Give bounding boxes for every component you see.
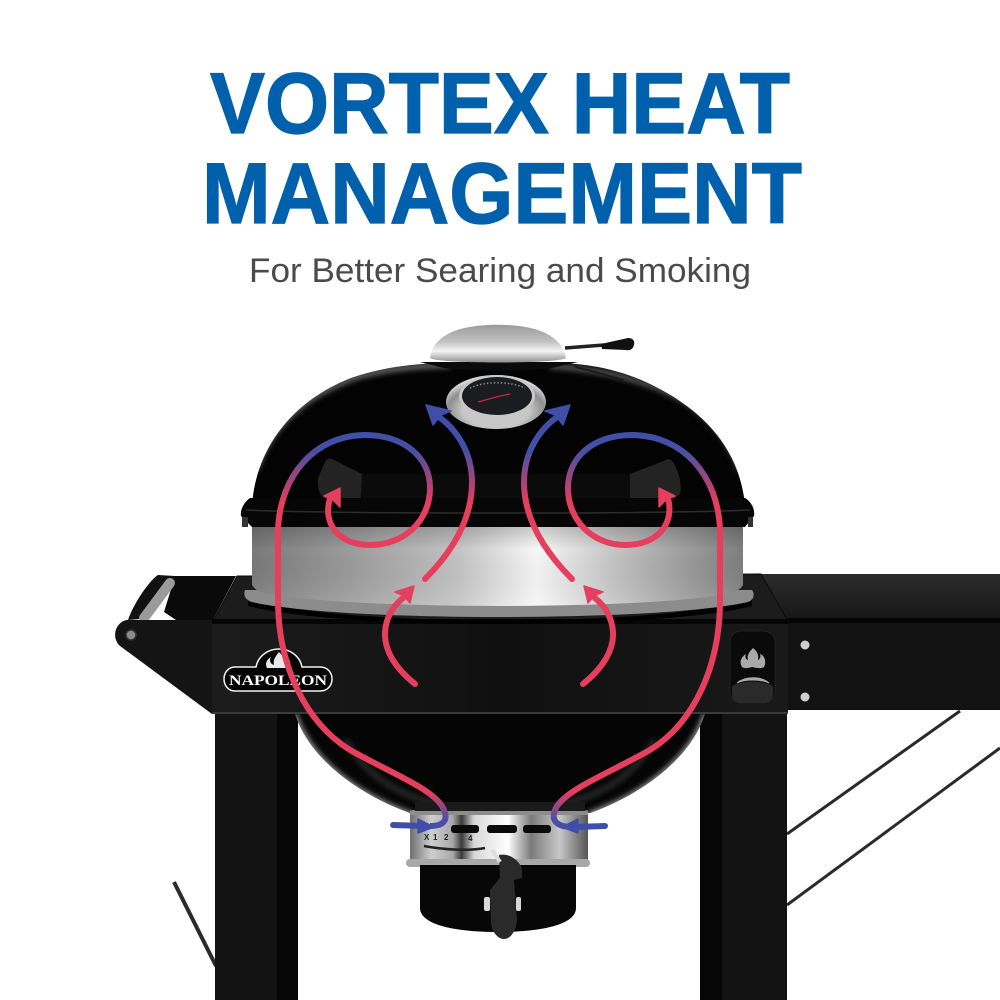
side plate [115, 620, 212, 714]
flange [406, 859, 590, 867]
outer loop right [554, 435, 720, 827]
screws [800, 640, 810, 650]
lever [490, 855, 522, 939]
black cup [420, 865, 576, 932]
bolt [126, 630, 136, 640]
thermometer [446, 375, 546, 429]
lid handle right [630, 459, 681, 510]
legs [215, 712, 787, 1000]
shelf top [760, 574, 1000, 621]
intake left [393, 819, 434, 833]
dome [252, 363, 745, 505]
title line 2: MANAGEMENT [202, 146, 802, 242]
top vent [420, 325, 634, 380]
cart top and front panel [212, 574, 788, 714]
dome highlight [256, 365, 740, 470]
lid handle left [318, 458, 362, 510]
vent lever [565, 345, 604, 348]
intake right [562, 819, 605, 833]
thermometer ring [446, 375, 546, 429]
right side shelf [760, 574, 1000, 710]
vent scale numbers: 4 [468, 834, 473, 843]
vent scale numbers: X [424, 833, 430, 842]
vent scale numbers: 1 [433, 833, 438, 842]
title line 1: VORTEX HEAT [210, 56, 790, 152]
steel band [252, 525, 743, 606]
switch flame icon [741, 648, 765, 668]
cart top surface [213, 574, 788, 621]
rim [241, 498, 754, 527]
centre arrow left [425, 405, 472, 579]
airflow arrows [278, 405, 720, 833]
shelf front [788, 622, 1000, 710]
vent slots [451, 825, 551, 833]
grill illustration [115, 325, 1000, 1000]
tray [160, 576, 236, 620]
outer loop left [278, 435, 446, 826]
left handle and tray [115, 575, 236, 714]
ash catcher [406, 802, 590, 939]
lower arrow left [385, 586, 415, 684]
logo wordmark: NAPOLEON [229, 673, 327, 689]
side rods [174, 711, 1000, 966]
base shadow [248, 598, 752, 624]
ash catcher steel collar [410, 810, 588, 862]
vent scale numbers: 2 [444, 833, 449, 842]
lower arrow right [583, 586, 613, 684]
vent base [420, 362, 578, 370]
centre arrow right [524, 405, 572, 579]
cart front panel [212, 622, 788, 713]
base plate [244, 590, 754, 617]
subtitle: For Better Searing and Smoking [249, 252, 751, 290]
vent scale numbers [424, 833, 473, 843]
rocker switch [730, 631, 775, 703]
vent dome [430, 325, 566, 362]
Napoleon logo [224, 649, 332, 691]
handle bar [128, 575, 175, 620]
base plate and steel band [244, 525, 754, 624]
lid [241, 363, 754, 527]
bowl [294, 714, 706, 815]
thermometer dial [459, 375, 535, 417]
lid handle centre [360, 474, 630, 510]
logo flame [266, 652, 290, 668]
title [202, 56, 802, 242]
